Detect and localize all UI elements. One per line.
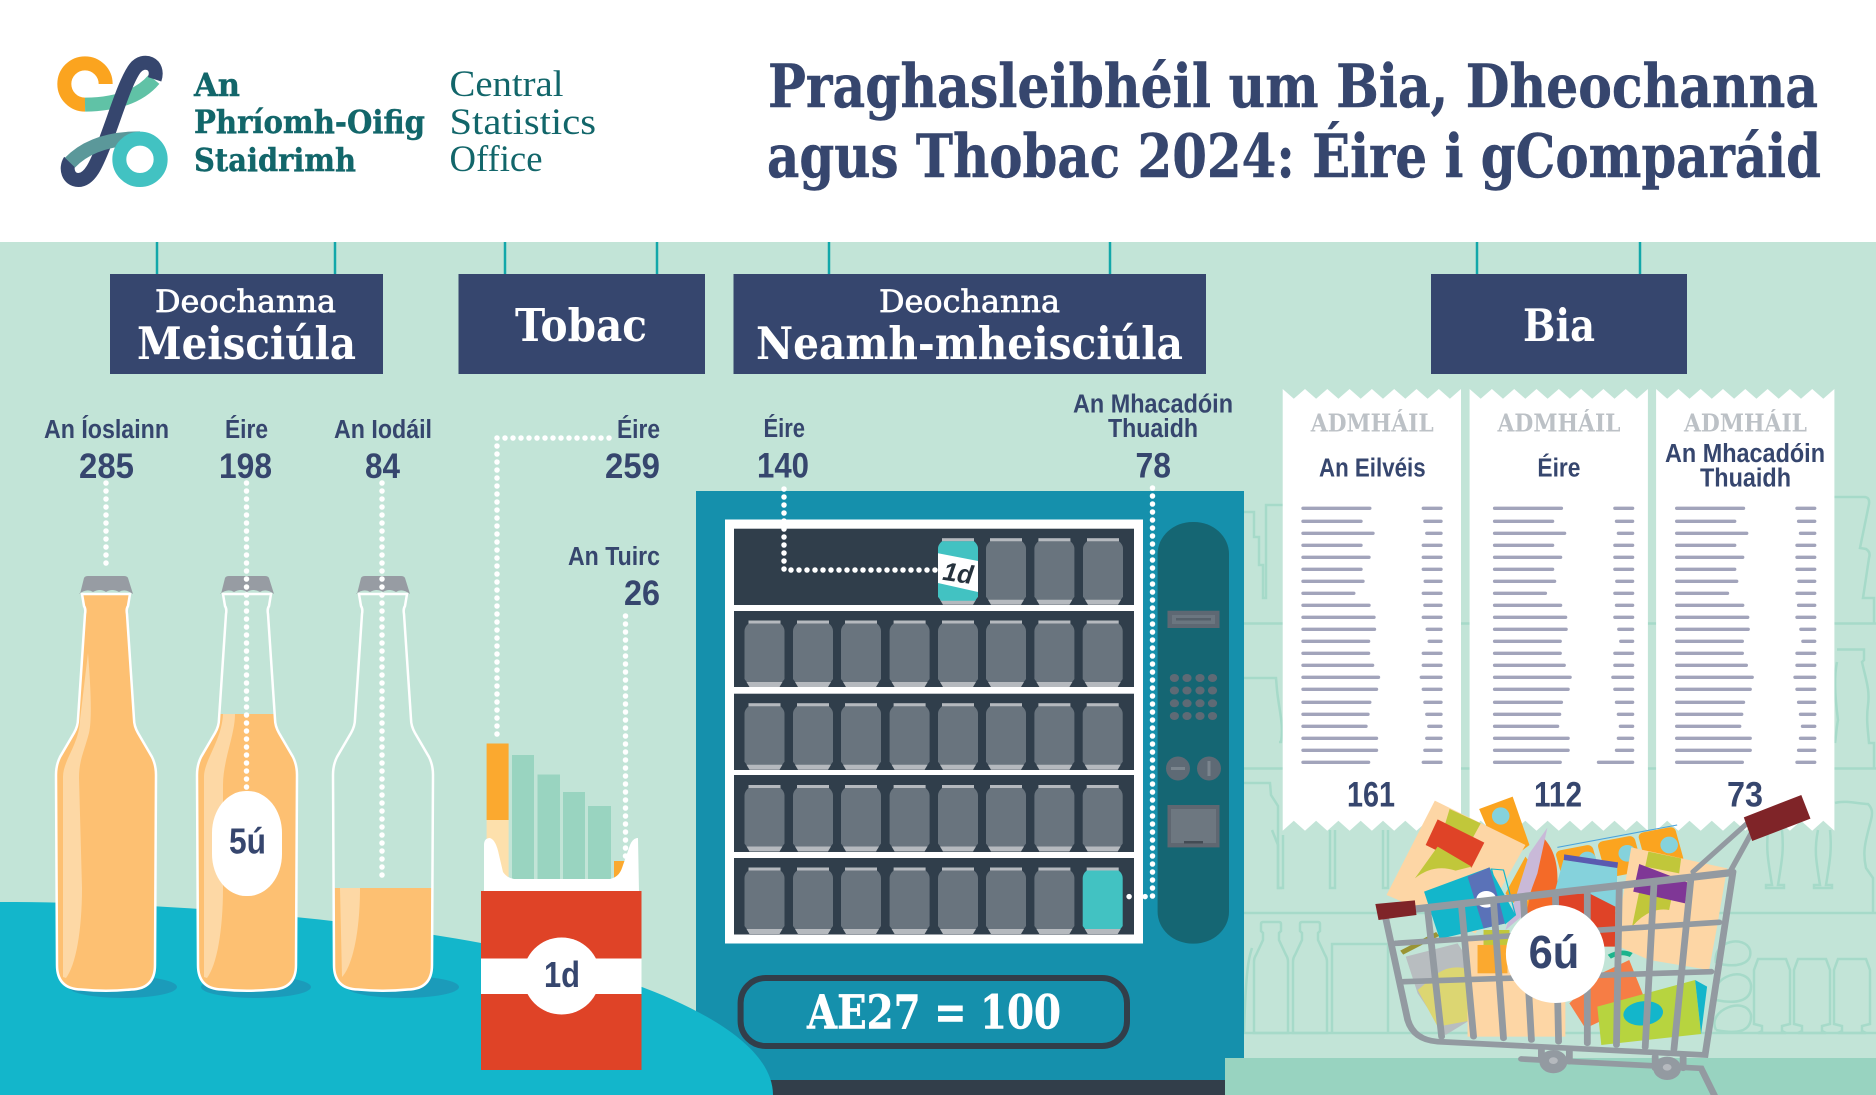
receipt: North Macedonia 73: ADMHÁIL [1683,408,1807,437]
labels: alcoholic drinks: 285 [79,447,134,486]
labels: alcoholic drinks: Éire [225,415,268,444]
bottle: Italy 84 [323,576,459,1000]
heading: non-alcoholic drinks: Neamh-mheisciúla [756,317,1183,370]
labels: tobacco: An Tuirc [568,543,660,571]
logo text: English: Office [450,139,542,180]
cigarette pack: 1d [544,954,580,995]
highlighted can: North Macedonia [1083,868,1123,934]
receipt: North Macedonia 73: 73 [1727,776,1763,815]
highlighted can: Ireland, 1st: 1d [941,556,976,590]
heading: food: Bia [1523,299,1595,352]
receipt: North Macedonia 73 [1656,389,1834,831]
background: shelf area [0,242,1876,1095]
cart frame [1386,822,1752,1095]
index note: AE27 = 100: AE27 = 100 [806,985,1061,1040]
labels: tobacco [568,415,660,613]
logo text: English: Central [450,64,564,105]
labels: non-alcoholic drinks: Éire [764,414,805,443]
labels: non-alcoholic drinks [757,390,1233,486]
logo icon [64,63,161,180]
cart handles [1375,795,1810,920]
receipt: North Macedonia 73: Thuaidh [1700,465,1791,493]
vending machine [696,491,1244,1095]
heading: tobacco: Tobac [515,299,647,352]
vending control panel [1158,522,1229,944]
receipt: Switzerland 161: ADMHÁIL [1310,408,1434,437]
heading: tobacco [458,274,705,374]
receipt: North Macedonia 73: An Mhacadóin [1665,440,1825,468]
cigarette bars [487,744,628,879]
rank badge: 6th: 6ú [1529,926,1579,978]
receipt: Ireland 112: 112 [1534,776,1582,815]
heading: non-alcoholic drinks: Deochanna [879,284,1060,320]
labels: alcoholic drinks [44,415,432,486]
bottle dotted leader lines [106,483,382,882]
labels: tobacco: Éire [617,415,660,444]
receipt: Ireland 112 [1470,389,1648,831]
labels: alcoholic drinks: An Iodáil [334,416,432,444]
receipt: Ireland 112: Éire [1537,454,1580,483]
title [767,52,1821,192]
cigarette pack [481,838,642,1070]
bottle: Ireland 198 [187,576,311,1000]
index note: AE27 = 100 [741,978,1127,1046]
heading: non-alcoholic drinks [734,274,1206,374]
logo text: Irish: Staidrimh [194,141,356,179]
vending window [725,520,1143,944]
labels: alcoholic drinks: An Íoslainn [44,415,169,444]
labels: non-alcoholic drinks: 78 [1136,447,1171,486]
heading: food [1431,274,1687,374]
receipt: Switzerland 161: 161 [1347,776,1395,815]
receipt: Switzerland 161: An Eilvéis [1319,455,1426,483]
logo text: English [450,64,596,180]
labels: tobacco: 26 [624,574,660,613]
floor [1225,1058,1876,1095]
labels: alcoholic drinks: 198 [219,447,272,486]
logo text: Irish: An [193,66,240,104]
hanging sign strings [157,242,1640,274]
labels: non-alcoholic drinks: 140 [757,447,809,486]
shelf bottles and cans [1254,922,1870,1033]
labels: alcoholic drinks: 84 [365,447,400,486]
heading: alcoholic drinks [110,274,383,374]
receipt: Switzerland 161 [1283,389,1461,831]
drinks dotted leader lines [784,488,1152,897]
heading: alcoholic drinks: Meisciúla [137,317,356,370]
rank badge: 5th [212,791,282,896]
labels: non-alcoholic drinks: An Mhacadóin [1073,390,1233,418]
table [0,902,773,1095]
shop shelves outline drawings [1244,497,1876,1033]
cart wheels [1539,1050,1681,1080]
highlighted can: Ireland, 1st [938,538,978,605]
logo text: Irish: Phríomh-Oifig [194,103,425,141]
rank badge: 6th [1506,905,1605,1003]
logo text: Irish [193,66,425,179]
tobacco dotted leader lines [497,438,626,859]
labels: non-alcoholic drinks: Thuaidh [1108,415,1198,443]
bottle: Iceland 285 [46,576,177,1000]
rank badge: 5th: 5ú [229,820,266,862]
header white band [0,0,1876,242]
heading: alcoholic drinks: Deochanna [155,284,336,320]
shopping cart [1375,795,1810,1095]
logo text: English: Statistics [450,102,596,143]
labels: tobacco: 259 [605,447,660,486]
receipt: Ireland 112: ADMHÁIL [1497,408,1621,437]
groceries [1387,797,1727,1045]
